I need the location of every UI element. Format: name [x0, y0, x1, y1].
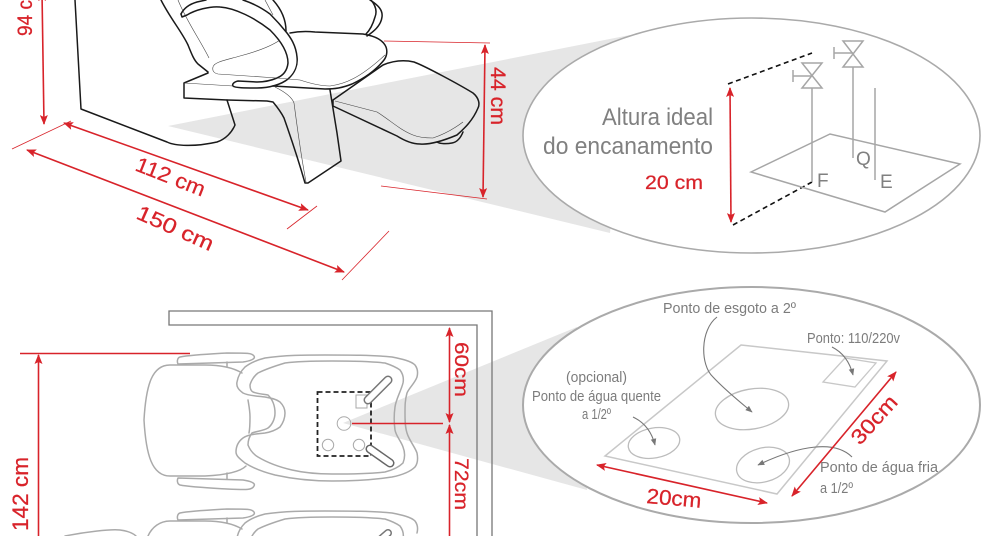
socket [356, 395, 367, 408]
pipe letters: Q [856, 149, 871, 170]
dimension: 72 cm: 72cm [450, 458, 471, 510]
icon: valve F [793, 63, 822, 88]
dimension: 94 cm height [14, 0, 44, 124]
dimension: 30 cm: 30cm [847, 391, 903, 449]
dimension: 20 cm [597, 465, 767, 513]
connection labels [532, 300, 939, 497]
dimension: 30 cm [792, 372, 903, 496]
connection labels: Ponto: 110/220v [807, 330, 900, 347]
dimension: 112 cm: 112 cm [132, 153, 209, 201]
dimension: 44 cm: 44 cm [486, 67, 509, 125]
dimension: 142 cm: 142 cm [8, 457, 33, 531]
connection labels: a 1/2º [582, 406, 611, 423]
connection labels: (opcional) [566, 369, 627, 386]
arrow: height [730, 88, 731, 222]
dimension: 44 cm [381, 41, 509, 199]
plate outline [605, 345, 887, 494]
icon: valve Q [834, 41, 863, 67]
dimension: 150 cm [27, 150, 389, 280]
dashed guides [728, 53, 812, 225]
socket outline [823, 358, 876, 387]
callout: ideal plumbing height [523, 18, 980, 253]
dimension: 72 cm [450, 425, 471, 536]
connection labels: Ponto de esgoto a 2º [663, 300, 796, 317]
pipe letters [817, 149, 893, 193]
callout: connection points [523, 287, 980, 523]
dimension: 150 cm: 150 cm [133, 202, 217, 256]
pipe letters: E [880, 172, 893, 193]
floor plane and pipes [751, 67, 960, 212]
illustration: shampoo chair side view [75, 0, 479, 183]
illustration: chair plan view 2 [65, 509, 418, 536]
connection labels: Ponto de água quente [532, 388, 661, 405]
zoom cone: lower detail [343, 327, 587, 490]
drain box detail on plan [318, 380, 390, 463]
drain and water points [322, 417, 365, 451]
text: ideal plumbing height [543, 104, 713, 160]
wall plan view [169, 311, 492, 536]
illustration: chair plan view 1 [144, 353, 418, 490]
text: ideal plumbing height: Altura ideal [602, 104, 713, 131]
connection labels: Ponto de água fria [820, 459, 939, 476]
leader arrows [633, 317, 853, 465]
connection circles [626, 383, 793, 488]
dimension: 60 cm: 60cm [450, 342, 471, 397]
value: 20 cm: 20 cm [645, 173, 703, 194]
dimension: 60 cm [352, 328, 471, 424]
handles [368, 380, 390, 463]
pipe letters: F [817, 171, 829, 192]
dimension: 112 cm [12, 121, 317, 229]
dimension: 20 cm: 20cm [646, 485, 702, 513]
connection labels: a 1/2º [820, 480, 853, 497]
dashed box [318, 392, 371, 456]
text: ideal plumbing height: do encanamento [543, 133, 713, 160]
zoom cone: upper detail [168, 35, 630, 233]
